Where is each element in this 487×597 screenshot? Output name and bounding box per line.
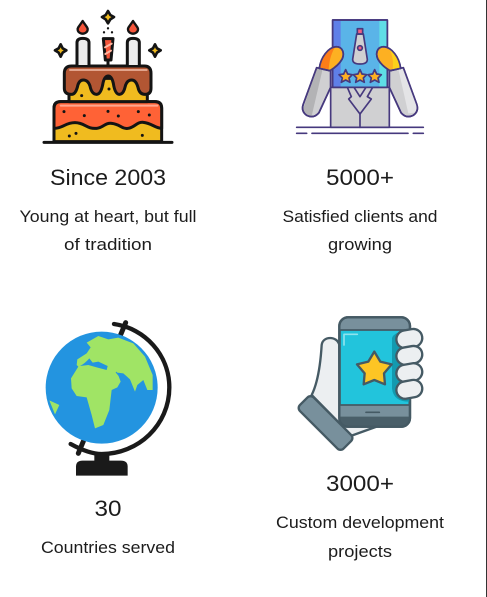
left arm bbox=[303, 68, 331, 117]
confetti dots bbox=[62, 27, 151, 137]
text: since 2003 description: of tradition bbox=[64, 236, 152, 254]
heading: 30: 30 bbox=[94, 496, 122, 521]
icon: birthday cake bbox=[44, 11, 172, 142]
heading: since 2003: Since 2003 bbox=[50, 165, 166, 190]
sparkles bbox=[55, 11, 161, 57]
heading: 3000+: 3000+ bbox=[326, 471, 394, 496]
top tier bbox=[64, 66, 151, 102]
desk lines bbox=[297, 127, 423, 133]
fingers bbox=[395, 328, 424, 400]
phone bbox=[339, 317, 410, 427]
suit body bbox=[331, 87, 389, 127]
text: satisfied clients: Satisfied clients and bbox=[282, 208, 438, 226]
globe sphere bbox=[46, 332, 158, 444]
text: custom development: projects bbox=[328, 543, 392, 561]
candles bbox=[77, 21, 139, 65]
star bbox=[357, 352, 392, 384]
table line bbox=[44, 138, 172, 147]
text: countries served: Countries served bbox=[41, 539, 175, 557]
bottom tier bbox=[54, 102, 162, 142]
text: satisfied clients bbox=[282, 208, 438, 254]
text: custom development: Custom development bbox=[276, 514, 444, 532]
text: custom development bbox=[276, 514, 444, 561]
left hand bbox=[319, 47, 343, 71]
text: satisfied clients: growing bbox=[328, 236, 392, 254]
heading: 5000+: 5000+ bbox=[326, 165, 394, 190]
text: since 2003 description bbox=[20, 208, 196, 254]
right hand bbox=[377, 47, 401, 71]
sleeve cuff bbox=[297, 394, 354, 452]
product card bbox=[333, 20, 387, 87]
icon: man holding rated product card bbox=[297, 20, 423, 133]
icon: hand holding phone with star bbox=[297, 317, 424, 452]
stand bbox=[71, 323, 169, 476]
hand palm bbox=[312, 338, 377, 436]
right arm bbox=[389, 68, 417, 117]
text: since 2003 description: Young at heart, but full bbox=[20, 208, 196, 226]
icon: desk globe bbox=[46, 323, 169, 476]
continents bbox=[49, 336, 153, 428]
